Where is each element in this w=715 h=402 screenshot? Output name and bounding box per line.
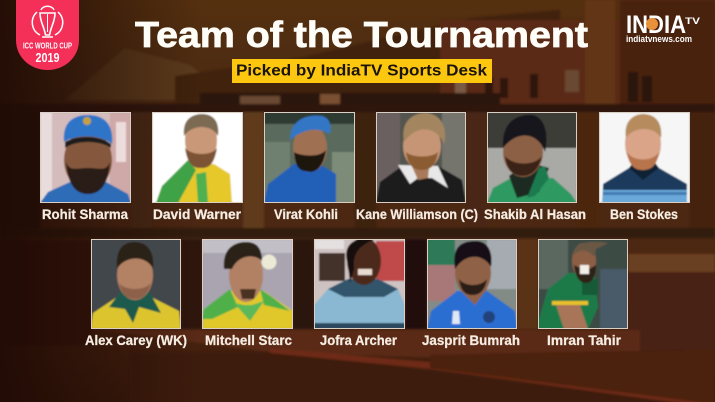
player card: Shakib Al Hasan xyxy=(484,112,586,222)
player card: Imran Tahir: Imran Tahir xyxy=(547,333,622,348)
player card: Rohit Sharma: Rohit Sharma xyxy=(42,207,128,222)
player card: Jasprit Bumrah: Jasprit Bumrah xyxy=(422,333,520,348)
title: Team of the Tournament xyxy=(135,14,588,55)
player card: Shakib Al Hasan: Shakib Al Hasan xyxy=(484,207,586,222)
player card: David Warner xyxy=(152,112,243,222)
player card: Mitchell Starc xyxy=(202,239,293,348)
subtitle banner xyxy=(232,59,492,83)
player card: Jofra Archer xyxy=(314,237,405,348)
logo: ICC World Cup 2019 badge xyxy=(16,0,79,70)
logo: India TV: TV xyxy=(685,16,700,26)
icon: trophy xyxy=(32,6,63,37)
player card: Kane Williamson: Kane Williamson (C) xyxy=(356,207,478,222)
player card: Virat Kohli: Virat Kohli xyxy=(274,207,338,222)
logo: ICC World Cup 2019 badge: ICC WORLD CUP xyxy=(23,40,72,50)
player card: Imran Tahir xyxy=(538,239,628,348)
player card: Virat Kohli xyxy=(264,112,355,222)
logo: ICC World Cup 2019 badge: 2019 xyxy=(36,50,60,65)
player card: Ben Stokes: Ben Stokes xyxy=(610,207,678,222)
player card: David Warner: David Warner xyxy=(153,207,242,222)
logo: India TV: indiatvnews.com xyxy=(626,34,692,44)
player card: Alex Carey xyxy=(85,239,187,348)
player card: Mitchell Starc: Mitchell Starc xyxy=(205,333,292,348)
subtitle banner: Picked by IndiaTV Sports Desk xyxy=(236,62,487,80)
player card: Ben Stokes xyxy=(599,112,690,222)
player card: Jasprit Bumrah xyxy=(422,239,520,348)
player card: Kane Williamson xyxy=(356,112,478,222)
player card: Rohit Sharma xyxy=(40,112,131,222)
player card: Alex Carey: Alex Carey (WK) xyxy=(85,333,187,348)
logo: India TV: INDIA xyxy=(626,11,686,39)
player card: Jofra Archer: Jofra Archer xyxy=(320,333,398,348)
